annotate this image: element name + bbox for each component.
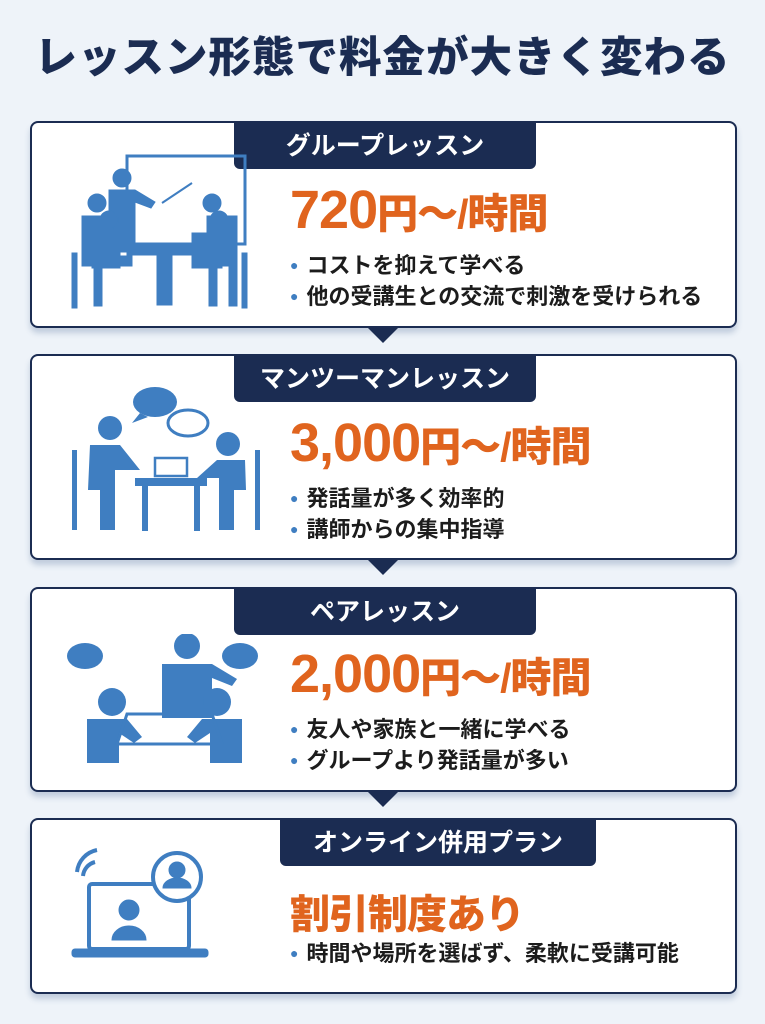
arrow 1 xyxy=(367,327,399,343)
panel: man-to-man xyxy=(30,354,737,560)
icon: laptop online xyxy=(72,848,208,958)
price: 3000: 3,000円〜/時間 xyxy=(290,413,591,473)
price: 720: 720円〜/時間 xyxy=(290,180,548,240)
icon: one on one xyxy=(72,387,260,531)
bullets: pair: ● 友人や家族と一緒に学べる xyxy=(290,717,570,742)
bullets: pair xyxy=(290,717,570,773)
bullets: man-to-man xyxy=(290,486,504,542)
tab: online xyxy=(280,820,596,866)
bullets: group: ● 他の受講生との交流で刺激を受けられる xyxy=(290,284,702,309)
bullets: group xyxy=(290,253,702,309)
price: 2000: 2,000円〜/時間 xyxy=(290,644,591,704)
bullets: man-to-man: ● 講師からの集中指導 xyxy=(290,517,504,542)
bullets: group: ● コストを抑えて学べる xyxy=(290,253,525,278)
panel: online plan xyxy=(30,818,737,994)
bullets: pair: ● グループより発話量が多い xyxy=(290,748,569,773)
tab: man-to-man: マンツーマンレッスン xyxy=(260,365,510,393)
tab: pair lesson xyxy=(234,589,536,635)
tab: man-to-man xyxy=(234,356,536,402)
icon: group classroom xyxy=(72,154,248,308)
tab: online: オンライン併用プラン xyxy=(313,829,563,857)
bullet: online: ● 時間や場所を選ばず、柔軟に受講可能 xyxy=(290,941,679,966)
panel: group lesson xyxy=(30,121,737,328)
tab: pair lesson: ペアレッスン xyxy=(310,598,460,626)
tab: group lesson xyxy=(234,123,536,169)
bullets: man-to-man: ● 発話量が多く効率的 xyxy=(290,486,504,511)
panel: pair lesson xyxy=(30,587,737,792)
icon: pair group xyxy=(67,634,258,763)
arrow 3 xyxy=(367,791,399,807)
title: レッスン形態で料金が大きく変わる xyxy=(34,35,730,82)
tab: group lesson: グループレッスン xyxy=(286,132,484,160)
headline: discount: 割引制度あり xyxy=(290,893,524,937)
arrow 2 xyxy=(367,559,399,575)
